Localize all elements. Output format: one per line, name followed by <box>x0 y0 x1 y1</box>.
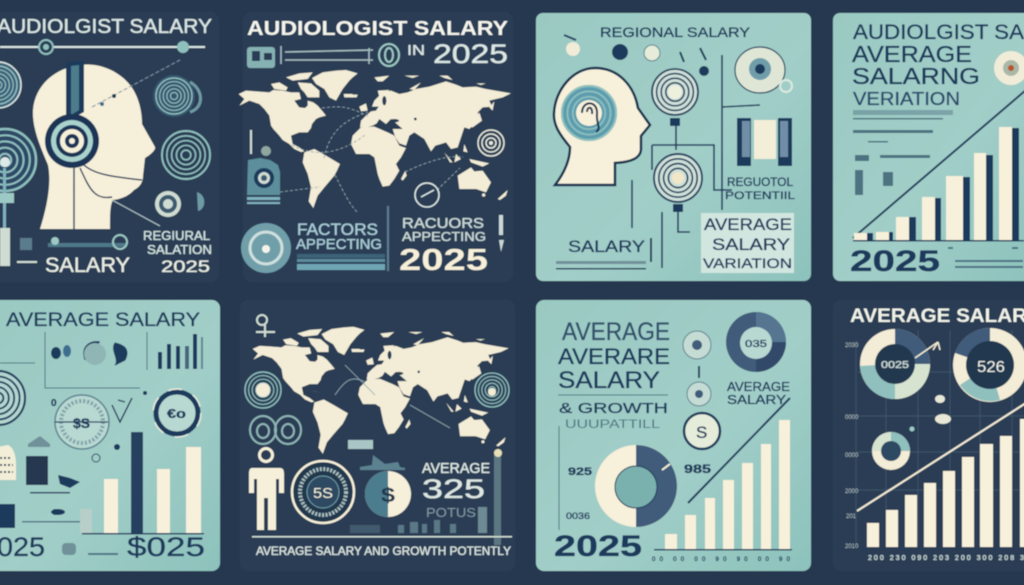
rule <box>252 536 512 538</box>
small icons <box>51 342 127 365</box>
panel background <box>243 12 513 282</box>
panel: growth chart dark <box>833 300 1024 571</box>
callout: average salary variation: AVERAGE <box>704 215 792 234</box>
icon: swirl left <box>0 371 25 425</box>
panel background <box>240 300 515 571</box>
world map <box>239 70 511 208</box>
grid <box>856 330 1024 546</box>
icon: bed <box>28 436 50 447</box>
donut right: 526 <box>977 359 1005 376</box>
panel: regional salary <box>536 13 811 281</box>
pointer arrow <box>915 342 940 358</box>
label: racuors: RACUORS <box>402 215 484 232</box>
small marker <box>499 215 504 252</box>
label: potential: POTUS <box>426 505 476 520</box>
icon: half coin <box>365 471 411 517</box>
bar strip <box>297 206 389 271</box>
icon: dollar coin <box>684 413 720 449</box>
heading line 4: & GROWTH <box>559 400 668 417</box>
label: salary: SALARY <box>727 392 786 407</box>
world map <box>253 327 509 454</box>
heading line 1: AVERAGE <box>562 318 670 346</box>
trend line <box>853 90 1024 238</box>
bar chart <box>853 127 1024 242</box>
heading line 1: AUDIOLGIST SA <box>853 21 1024 44</box>
panel background <box>833 13 1024 281</box>
year: 2025 <box>554 530 642 563</box>
heading: year: 2025 <box>433 39 508 69</box>
icon: ear <box>735 47 792 93</box>
small marks <box>910 395 951 432</box>
dividers <box>0 332 147 388</box>
donut right <box>953 328 1024 402</box>
bar chart <box>654 420 792 550</box>
icon: dollar dial <box>55 395 109 449</box>
icon: arch <box>0 445 16 480</box>
icon: ear badge <box>994 51 1024 85</box>
icon: person <box>249 448 284 530</box>
panel: audiologist head <box>0 12 219 282</box>
icon: ring badge <box>153 389 201 437</box>
heading: AVERAGE SALARY <box>850 306 1024 327</box>
mini bar chart <box>158 334 203 369</box>
left device <box>0 228 37 266</box>
icon: rings bottom <box>653 153 703 212</box>
icon: ring badge: €o <box>167 406 186 421</box>
icon: dollar coin: S <box>696 423 707 442</box>
icon: book <box>348 440 405 470</box>
panel: salary variation bars <box>833 13 1024 281</box>
label: year: 2025 <box>399 242 488 277</box>
panel: map with growth <box>240 300 515 571</box>
icon: dollar dial: $S <box>73 415 90 431</box>
connection lines <box>280 107 463 213</box>
icon: top cross <box>256 315 275 337</box>
bottom chart ghost <box>350 520 456 533</box>
trend line <box>688 398 790 503</box>
icon: seal: 5S <box>313 485 333 502</box>
icon: swirl left bottom <box>0 129 36 228</box>
heading: in: IN <box>407 42 425 59</box>
icon: target dial <box>241 223 291 273</box>
scatter marks <box>22 391 147 522</box>
panel background <box>0 300 220 571</box>
icon: rings top <box>651 68 699 126</box>
icon: sound rings top <box>153 75 200 117</box>
head silhouette <box>33 64 155 229</box>
label: salary: SALARY <box>45 254 130 277</box>
icon: rings right <box>475 373 509 407</box>
headset <box>45 61 142 229</box>
y label: 2000 <box>845 489 859 495</box>
small icons row <box>564 35 709 76</box>
label: salation: SALATION <box>147 242 212 257</box>
label: average: AVERAGE <box>422 460 490 477</box>
donut left: 0025 <box>881 360 910 371</box>
heading line 5: UUUPATTILL <box>565 417 660 431</box>
icon: seal <box>292 461 354 523</box>
dollar amount: $025 <box>127 532 205 562</box>
y axis labels: 2030 <box>845 343 859 349</box>
value left: 925 <box>568 466 592 478</box>
heading line 4: VERIATION <box>853 89 960 109</box>
y label: 2010 <box>845 544 859 550</box>
heading: AVERAGE SALARY <box>6 310 200 331</box>
callout: average salary variation <box>701 213 794 273</box>
heading: REGIONAL SALARY <box>600 24 751 40</box>
value right: 985 <box>684 462 711 476</box>
heading line 3: SALARNG <box>852 63 980 89</box>
icon: small ear circle <box>155 191 204 217</box>
callout: average salary variation: VARIATION <box>703 255 792 271</box>
icon: rings left <box>245 372 281 408</box>
heading: AUDIOLGIST SALARY <box>0 16 212 38</box>
bottom rule <box>556 238 652 270</box>
donut left <box>860 329 930 399</box>
faint notes <box>853 110 953 195</box>
icon: tower <box>478 449 502 545</box>
pointer to label <box>112 200 160 226</box>
donut top: 035 <box>745 339 768 350</box>
connector lines <box>632 55 760 268</box>
label: affecting: APPECTING <box>296 236 382 253</box>
icon: sound rings middle <box>162 131 210 179</box>
callout: average salary variation: SALARY <box>712 235 790 254</box>
heading line 2: AVERAGE <box>852 41 972 67</box>
panel: world map factors <box>239 12 513 282</box>
donut small <box>872 432 910 470</box>
y label: 0000 <box>845 453 859 459</box>
heading line 3: SALARY <box>558 367 660 394</box>
small digit: 0 <box>51 398 57 409</box>
caption: AVERAGE SALARY AND GROWTH POTENTLY <box>256 544 511 558</box>
figure: 325 <box>422 474 485 504</box>
donut top <box>726 312 786 372</box>
panel: salary and growth <box>536 300 811 571</box>
connection lines <box>335 365 450 428</box>
icon: dark box <box>26 456 48 485</box>
year: 2025 <box>850 245 940 278</box>
panel background <box>536 300 811 571</box>
label: year: 2025 <box>161 257 210 276</box>
trend line <box>857 403 1024 511</box>
rule <box>558 395 668 530</box>
bar chart <box>80 432 204 534</box>
label: regional: REGIURAL <box>143 228 210 243</box>
panel: average salary <box>0 300 220 571</box>
heading: AUDIOLOGIST SALARY <box>247 18 509 40</box>
value lower: 0036 <box>566 511 590 521</box>
pointer line <box>92 60 180 107</box>
icon: rings right <box>478 130 504 156</box>
heading line 2: AVERARE <box>558 344 670 369</box>
donut chart <box>595 445 677 527</box>
label: potential: POTENTIIL <box>725 190 795 202</box>
head with swirl <box>554 68 650 185</box>
label: regional: REGUOTOL <box>727 177 794 189</box>
top icons strip <box>247 44 399 68</box>
icon: screen <box>0 504 15 528</box>
label: salary: SALARY <box>568 237 645 256</box>
label: appecting: APPECTING <box>402 229 486 244</box>
icon: swirl left top <box>0 62 21 108</box>
small badge <box>62 543 118 555</box>
icon: half coin: $ <box>381 485 395 507</box>
label: factors: FACTORS <box>297 220 378 239</box>
y label: 0000 <box>845 415 859 421</box>
icon: small ring <box>415 183 439 207</box>
title slider <box>0 40 205 54</box>
bottom slider <box>48 235 127 249</box>
icon: small dial bottom <box>687 366 711 406</box>
icon: small dial top <box>683 331 711 359</box>
axis labels: 00 00 00 90 90 00 90 <box>652 557 791 563</box>
panel background <box>833 300 1024 571</box>
axis labels <box>948 247 1023 268</box>
panel background <box>536 13 811 281</box>
y label: 201 <box>846 514 857 520</box>
icon: double ears <box>250 416 301 444</box>
icon: tag device <box>247 130 280 204</box>
panel background <box>0 12 219 282</box>
bar chart <box>867 419 1024 547</box>
label: average: AVERAGE <box>727 379 790 394</box>
icon: device <box>737 118 792 166</box>
x axis labels: 200 230 090 203 200 300 208 3 <box>868 555 1024 562</box>
